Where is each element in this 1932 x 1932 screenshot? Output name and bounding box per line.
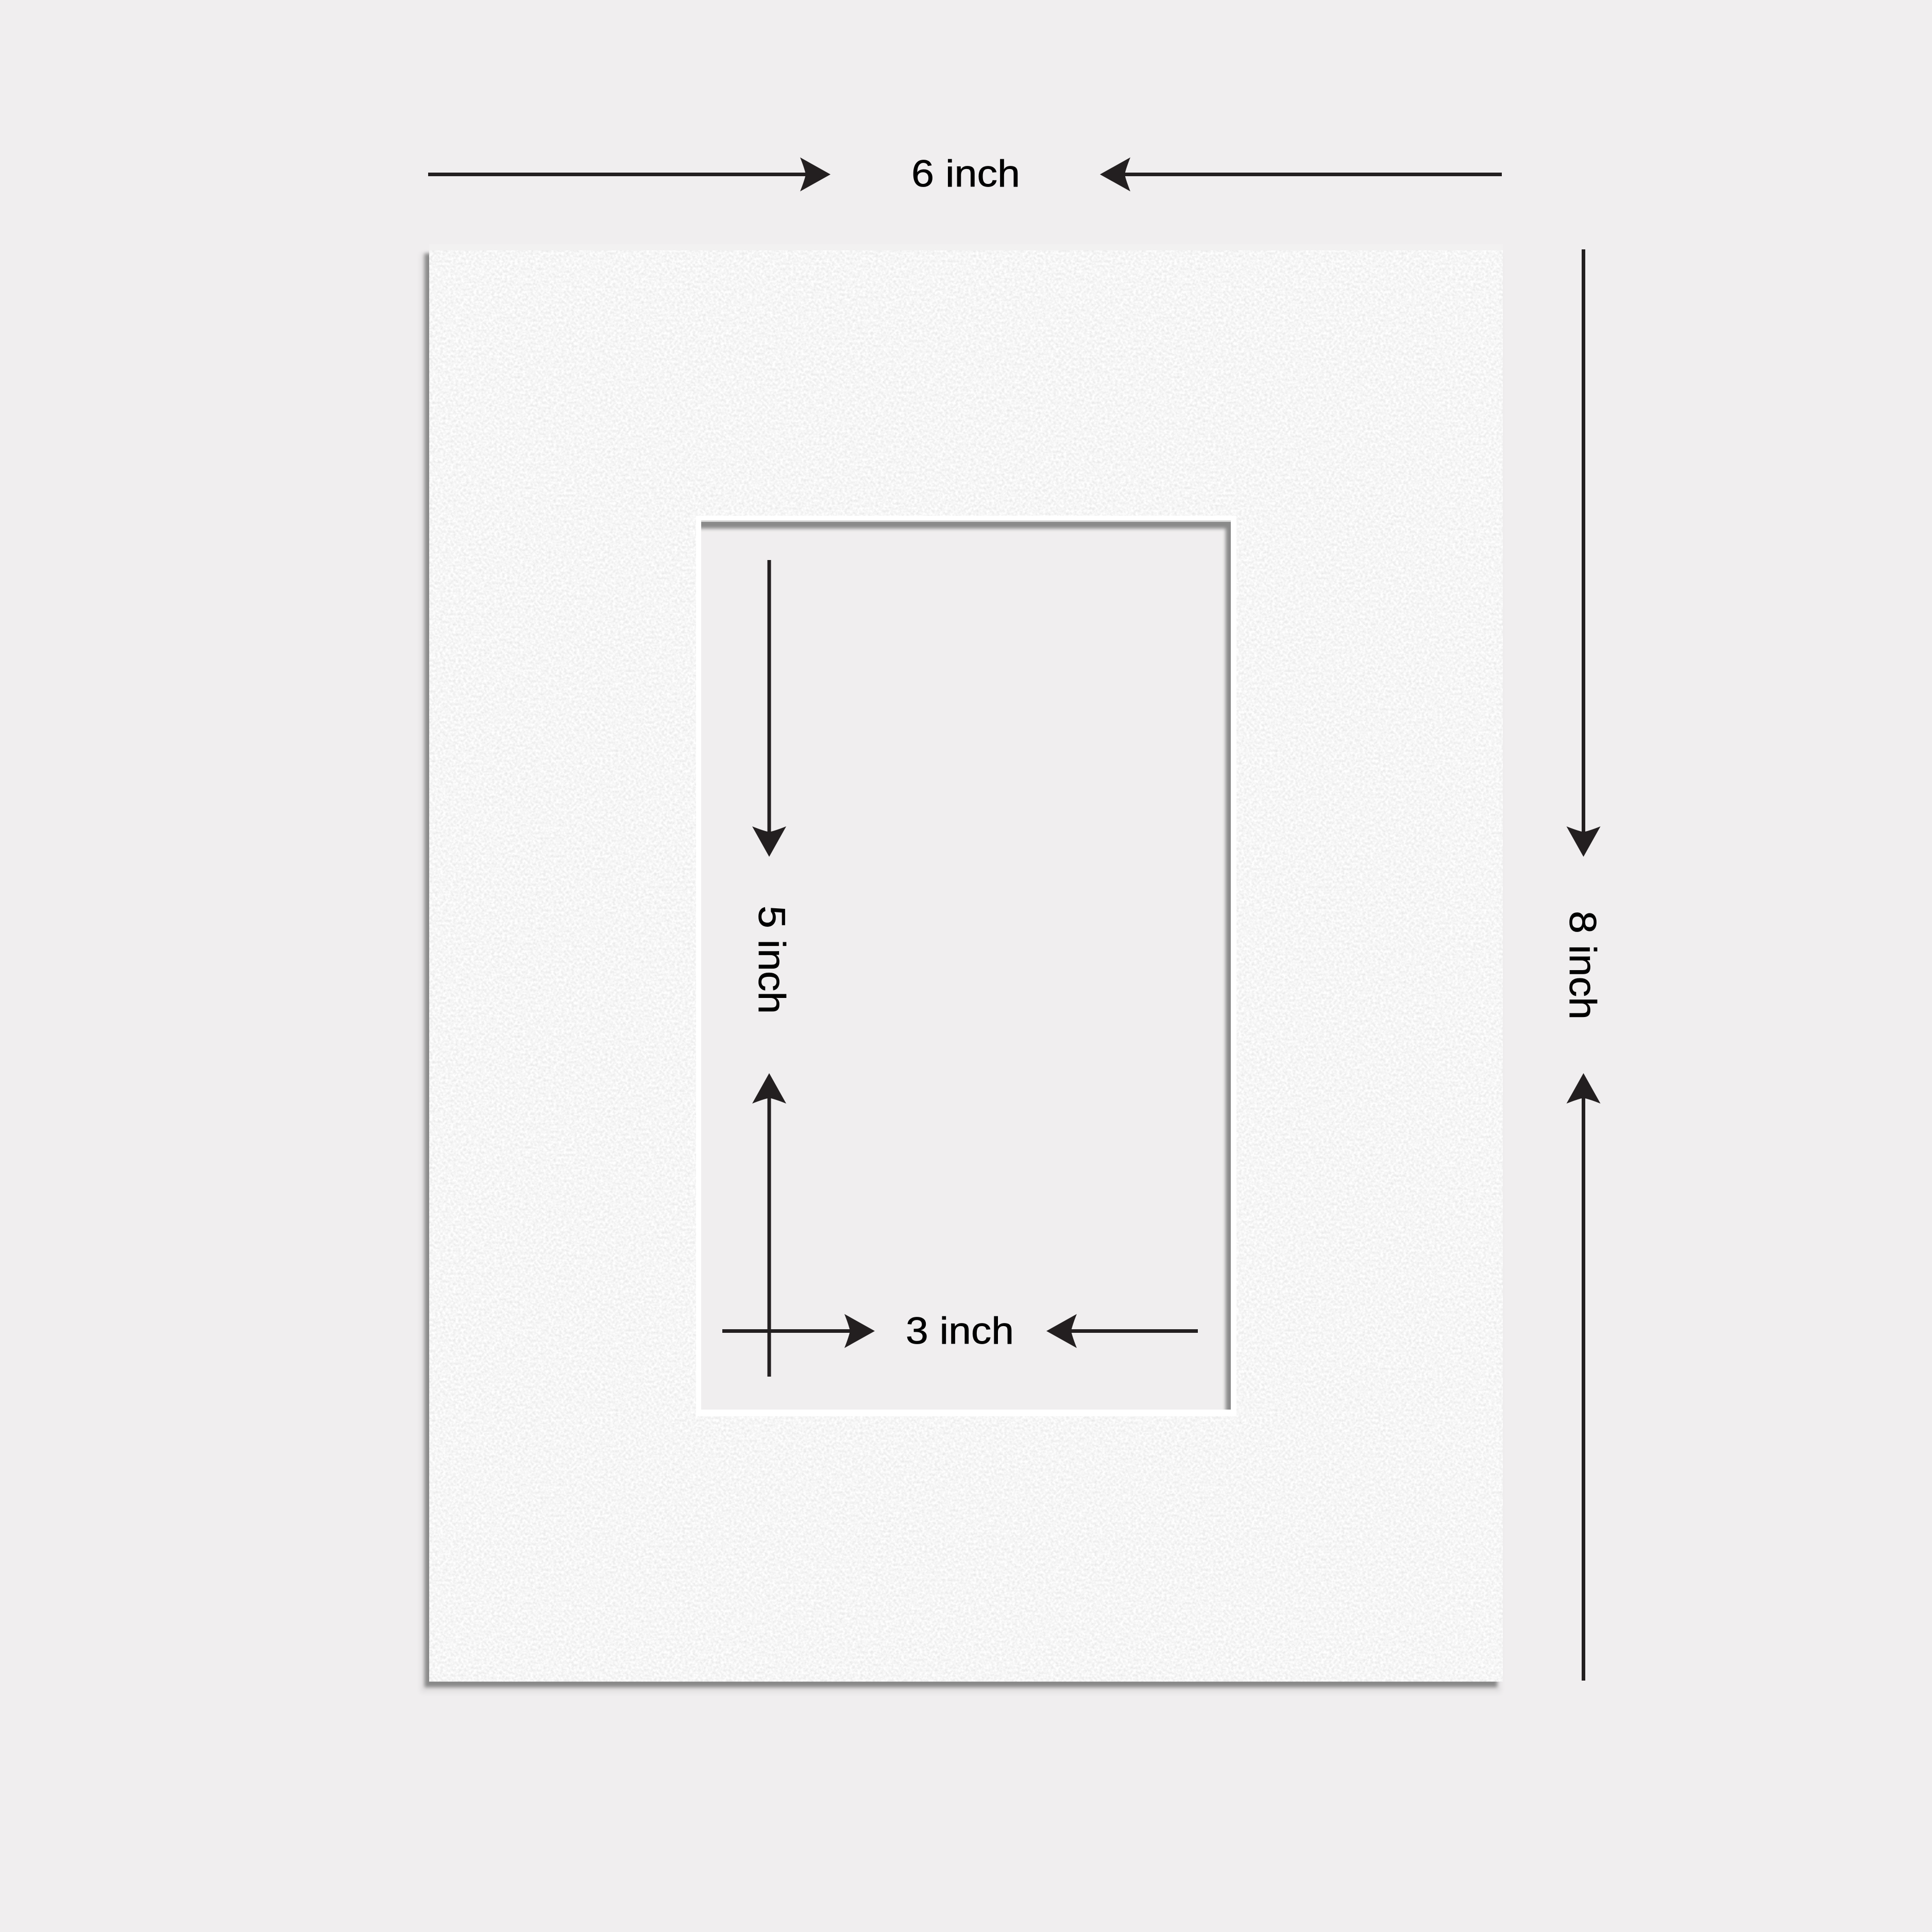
- label: 8 inch: 8 inch: [1562, 911, 1603, 1020]
- arrow: window width, right side: [1046, 1314, 1198, 1348]
- label: 6 inch: 6 inch: [911, 153, 1020, 195]
- panel: photo mat board: [420, 244, 1503, 1693]
- label: 3 inch: 3 inch: [906, 1310, 1014, 1352]
- window opening: [690, 510, 1242, 1422]
- infographic canvas: [421, 158, 1600, 1692]
- arrow: top width, left side: [428, 158, 831, 192]
- window bevel: [696, 516, 1236, 1416]
- mat drop shadow: [420, 253, 1501, 1693]
- arrow: outer height, top side: [1566, 249, 1600, 857]
- arrow: outer height, bottom side: [1566, 1073, 1600, 1681]
- arrow: window height, top side: [752, 560, 786, 857]
- arrow: window height, bottom side: [752, 1073, 786, 1377]
- mat top edge highlight: [429, 244, 1503, 250]
- arrow: window width, left side: [722, 1314, 875, 1348]
- label: 5 inch: 5 inch: [751, 906, 792, 1014]
- arrow: top width, right side: [1100, 158, 1502, 192]
- mat textured surface: [429, 250, 1503, 1682]
